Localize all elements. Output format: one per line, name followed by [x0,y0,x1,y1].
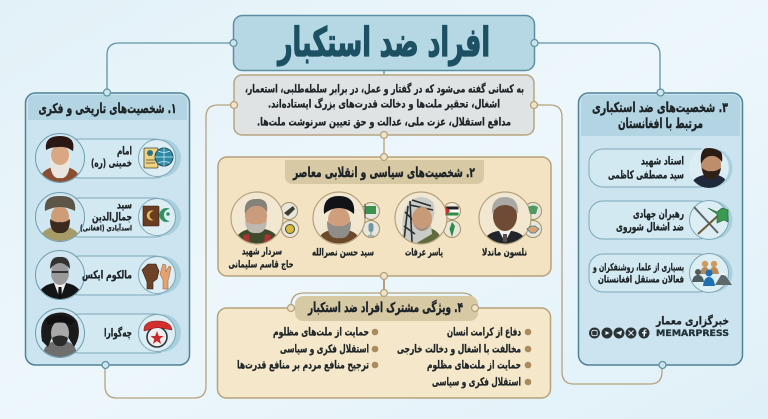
intro text panel [234,75,534,135]
name line 2: جمال‌الدین [92,210,132,224]
panel: common traits [218,296,550,398]
name line 3: اسدآبادی (افغانی) [80,222,132,232]
name line 2: خمینی (ره) [91,156,132,170]
connector: intro to panels [105,105,662,398]
row: scholars and activists [589,254,732,292]
row: Khomeini [36,134,181,182]
text line 2: ضد اشغال شوروی [616,220,684,234]
list: left column: استقلال فکری و سیاسی [280,342,369,356]
portrait: Kazemi [689,147,729,188]
heading 3 line 2: مرتبط با افغانستان [618,116,703,132]
name: سید [117,198,132,212]
list: left column [237,326,378,372]
social icons [589,328,650,338]
list: right column: دفاع از کرامت انسان [447,326,521,338]
row: Kazemi [589,147,732,188]
connector nodes [102,40,666,368]
icon: raised fists [138,256,176,294]
list: right column: استقلال فکری و سیاسی [432,376,521,388]
text line 1: رهبران جهادی [633,208,684,220]
portrait: Jamal al-Din [42,196,78,241]
intro line 1: به کسانی گفته می‌شود که در گفتار و عمل، در برابر سلطه‌طلبی، استعمار، [245,82,524,96]
logo: Memarpress: MEMARPRESS [656,329,729,339]
figure: Nasrallah [312,192,380,258]
portrait: Malcolm X [41,256,79,299]
icon: document and globe [138,140,176,176]
name line 2: سید مصطفی کاظمی [608,168,684,182]
row: Jamal al-Din [36,192,181,242]
figure: Mandela [479,192,542,258]
connector: title to side panels [107,43,660,92]
icon: beret with star [138,314,176,352]
connector nodes: tan [230,102,538,312]
portrait: Che Guevara [41,312,79,357]
portrait: Nasrallah [313,192,365,244]
list: right column: حمایت از ملت‌های مظلوم [427,358,521,372]
icon: swords and flag [690,200,728,240]
panel: historical figures [26,93,190,365]
list: left column: ترجیح منافع مردم بر منافع قدرت‌ها [237,358,369,372]
name line 1: سردار شهید [242,246,282,258]
row: Malcolm X [36,250,181,300]
intro line 2: اشغال، تحقیر ملت‌ها و دخالت قدرت‌های بزرگ ایستاده‌اند. [268,96,500,110]
name: یاسر عرفات [405,248,443,258]
text line 2: فعالان مستقل افغانستان [598,274,684,286]
name: چه‌گوارا [104,326,132,340]
row: Che Guevara [36,308,181,358]
list: right column [397,326,531,388]
figure: Soleimani [228,192,298,270]
logo: Memarpress [655,314,729,339]
text line 1: بسیاری از علما، روشنفکران و [592,262,684,274]
title panel [234,16,534,70]
name: امام [117,144,132,158]
panel: political and revolutionary figures [218,157,551,276]
heading 1: ۱. شخصیت‌های تاریخی و فکری [39,101,177,117]
figure: Arafat [395,192,460,258]
portrait: Soleimani [231,192,283,244]
name: سید حسن نصرالله [312,248,374,258]
panel: Afghanistan figures [578,93,742,365]
portrait: Khomeini [42,136,78,182]
name line 2: حاج قاسم سلیمانی [228,260,294,270]
icon: people and mountains [690,254,732,292]
heading 4: ۴. ویژگی مشترک افراد ضد استکبار [307,299,463,316]
heading 4 [295,296,478,321]
name: مالکوم ایکس [82,268,132,282]
intro line 3: مدافع استقلال، عزت ملی، عدالت و حق تعیین سرنوشت ملت‌ها. [257,116,511,128]
logo: Memarpress: خبرگزاری معمار [655,314,729,328]
list: right column: مخالفت با اشغال و دخالت خارجی [397,342,521,356]
name: نلسون ماندلا [482,248,527,258]
list: left column: حمایت از ملت‌های مظلوم [273,326,369,338]
name line 1: استاد شهید [641,154,684,168]
heading 2: ۲. شخصیت‌های سیاسی و انقلابی معاصر [292,165,476,181]
portrait: Mandela [479,192,531,244]
portrait: Arafat [395,192,447,244]
title: افراد ضد استکبار [277,20,490,66]
row: jihadi leaders [589,200,732,240]
icon: book and crescent [138,198,176,236]
heading 2 [285,160,484,184]
